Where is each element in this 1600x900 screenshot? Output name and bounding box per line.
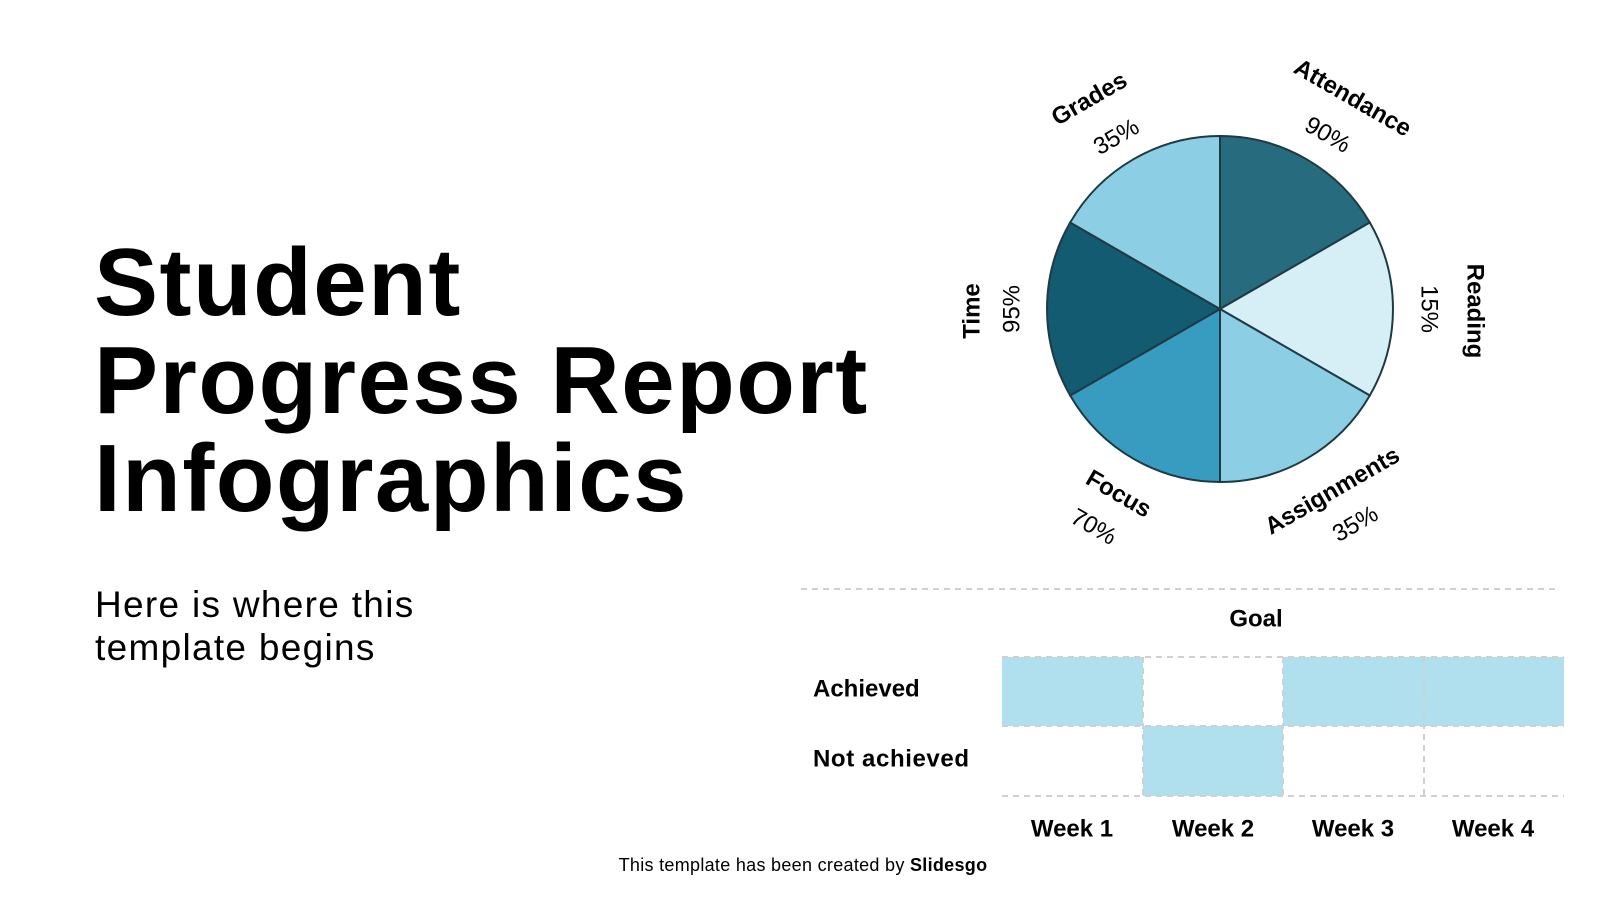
subtitle <box>95 584 415 668</box>
footer credit: This template has been created by Slidesgo <box>619 855 987 875</box>
goal table: Week 3 <box>1312 815 1394 842</box>
pie chart: 15% <box>1416 285 1443 333</box>
pie chart: Grades <box>1047 67 1132 131</box>
pie chart: Time <box>958 283 985 339</box>
pie chart: 35% <box>1328 500 1383 548</box>
pie chart: 35% <box>1089 113 1144 161</box>
goal table: Achieved <box>813 675 920 702</box>
goal table: Week 1 <box>1031 815 1113 842</box>
pie chart: 95% <box>998 285 1025 333</box>
pie chart: Assignments <box>1260 442 1404 540</box>
title: Infographics <box>94 425 688 532</box>
subtitle: template begins <box>95 627 376 668</box>
pie chart: 70% <box>1066 503 1121 551</box>
goal table: Goal <box>1229 605 1283 632</box>
goal table: Week 2 <box>1172 815 1254 842</box>
pie chart: Attendance <box>1289 54 1416 142</box>
pie chart: Focus <box>1081 465 1156 523</box>
title: Progress Report <box>94 327 869 434</box>
subtitle: Here is where this <box>95 584 415 625</box>
title: Student <box>94 229 462 336</box>
pie chart: 90% <box>1300 111 1355 159</box>
goal table: Not achieved <box>813 745 970 772</box>
title <box>94 229 869 532</box>
goal table: Week 4 <box>1452 815 1535 842</box>
pie chart: Reading <box>1462 264 1489 358</box>
